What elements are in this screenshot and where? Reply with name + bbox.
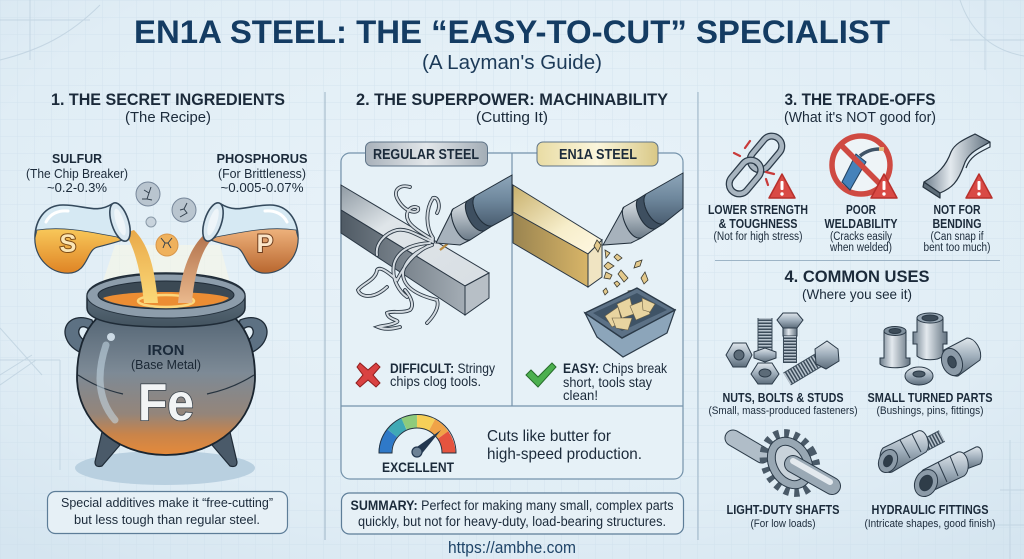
pill: EN1A steel <box>537 142 658 166</box>
stringy chips <box>358 186 439 329</box>
label: lower strength: (Not for high stress) <box>714 231 803 243</box>
panel: secret ingredients <box>26 90 308 534</box>
label: lower strength <box>708 203 808 243</box>
comparison frame <box>341 153 683 479</box>
illustration: broken chips <box>594 240 648 298</box>
subheading: recipe: (The Recipe) <box>125 109 211 126</box>
label: lower strength: & TOUGHNESS <box>718 217 798 231</box>
callout: additives <box>48 492 288 534</box>
pill: EN1A steel: EN1A STEEL <box>559 147 637 163</box>
label: iron <box>131 342 201 372</box>
label: poor weldability: POOR <box>846 203 876 217</box>
section divider <box>715 260 1000 262</box>
label: lower strength: LOWER STRENGTH <box>708 203 808 217</box>
liquid streams <box>125 230 213 303</box>
text: cuts like butter: high-speed production. <box>487 446 642 463</box>
label: poor weldability: WELDABILITY <box>824 217 898 231</box>
subtitle: (A Layman's Guide) <box>422 52 602 74</box>
callout: additives: Special additives make it “free-cutting” <box>61 495 273 510</box>
heading: section 1: 1. THE SECRET INGREDIENTS <box>51 90 285 109</box>
cauldron legs <box>95 432 237 466</box>
label: not for bending: NOT FOR <box>934 203 980 217</box>
label: sulfur: (The Chip Breaker) <box>26 166 128 181</box>
icon: cauldron <box>65 230 267 485</box>
label: phosphorus: PHOSPHORUS <box>216 151 308 166</box>
text: difficult <box>390 360 495 389</box>
text: difficult: DIFFICULT: Stringy <box>390 360 495 376</box>
icon: green check <box>526 363 556 387</box>
label: nuts bolts: (Small, mass-produced fasteners) <box>708 405 858 417</box>
label: shafts: LIGHT-DUTY SHAFTS <box>726 503 840 517</box>
text: cuts like butter: Cuts like butter for <box>487 428 612 445</box>
subheading: not good for: (What it's NOT good for) <box>784 109 936 126</box>
label: phosphorus: ~0.005-0.07% <box>220 180 304 195</box>
illustration: EN1A cutting tool <box>603 173 683 245</box>
label: Fe: Fe <box>138 374 194 432</box>
panel: machinability <box>341 90 684 534</box>
icon: phosphorus flask: P <box>257 230 273 258</box>
gauge <box>379 414 456 475</box>
label: sulfur: SULFUR <box>52 151 103 166</box>
cauldron rim <box>87 273 245 327</box>
cauldron body <box>77 318 255 455</box>
icon: bent plate <box>923 134 990 198</box>
label: phosphorus: (For Brittleness) <box>218 166 306 181</box>
callout: additives: but less tough than regular steel. <box>74 512 260 527</box>
label: nuts bolts: NUTS, BOLTS & STUDS <box>722 391 844 405</box>
label: hydraulic <box>864 503 996 530</box>
icon: warning bending <box>966 174 992 198</box>
label: not for bending <box>924 203 991 254</box>
label: poor weldability: when welded) <box>829 242 892 254</box>
label: nuts bolts <box>708 391 858 417</box>
text: easy: short, tools stay <box>563 374 652 390</box>
panel: common uses <box>708 267 996 530</box>
cauldron handles <box>65 318 267 354</box>
label: hydraulic: HYDRAULIC FITTINGS <box>872 503 988 517</box>
text: easy: EASY: Chips break <box>563 360 668 376</box>
icon: sulfur flask <box>35 200 134 273</box>
text: easy <box>563 360 668 403</box>
icon: cracked bubbles <box>136 182 196 256</box>
illustration: regular steel bar <box>341 185 489 329</box>
label: turned parts: (Bushings, pins, fittings) <box>876 405 984 417</box>
text: easy: clean! <box>563 387 598 403</box>
icon: turned parts <box>880 313 981 385</box>
label: poor weldability <box>824 203 898 254</box>
callout: summary <box>342 493 684 534</box>
icon: broken chain <box>725 132 786 198</box>
subheading: where: (Where you see it) <box>802 286 912 302</box>
icon: no welding <box>832 136 890 194</box>
heading: section 3: 3. THE TRADE-OFFS <box>784 90 936 109</box>
label: not for bending: BENDING <box>932 217 982 231</box>
gauge label: EXCELLENT <box>382 460 455 475</box>
pill: regular steel <box>366 142 488 166</box>
label: phosphorus <box>216 151 308 195</box>
icon: red cross <box>356 363 380 387</box>
icon: warning chain <box>769 174 795 198</box>
label: sulfur <box>26 151 128 195</box>
label: hydraulic: (Intricate shapes, good finish) <box>864 518 996 530</box>
icon: gear shaft <box>733 424 832 502</box>
column dividers <box>325 92 698 540</box>
icon: nuts and bolts <box>726 313 839 384</box>
label: turned parts: SMALL TURNED PARTS <box>868 391 992 405</box>
label: poor weldability: (Cracks easily <box>830 231 892 243</box>
label: turned parts <box>868 391 992 417</box>
pill: regular steel: REGULAR STEEL <box>373 147 479 163</box>
heading: section 4: 4. COMMON USES <box>784 267 930 286</box>
cauldron shadow <box>75 451 255 485</box>
text: cuts like butter <box>487 428 642 463</box>
panel: trade-offs <box>708 90 992 254</box>
icon: hydraulic fittings <box>875 431 982 500</box>
icon: sulfur flask: S <box>60 230 76 258</box>
illustration: regular steel cutting tool <box>436 175 512 245</box>
heading: section 2: 2. THE SUPERPOWER: MACHINABILITY <box>356 90 669 109</box>
label: iron: (Base Metal) <box>131 357 201 372</box>
callout: summary: SUMMARY: Perfect for making many small, complex parts <box>350 498 674 513</box>
label: iron: IRON <box>148 342 184 359</box>
footer url: https://ambhe.com <box>448 539 576 557</box>
text: difficult: chips clog tools. <box>390 373 481 389</box>
illustration: EN1A steel bar <box>513 185 602 287</box>
illustration: chip bin <box>585 288 675 357</box>
glow behind flasks <box>100 245 232 290</box>
icon: phosphorus flask <box>199 200 298 273</box>
label: shafts <box>726 503 840 530</box>
title: EN1A STEEL: THE “EASY-TO-CUT” SPECIALIST <box>134 14 890 50</box>
label: shafts: (For low loads) <box>750 518 816 530</box>
icon: warning welding <box>871 174 897 198</box>
callout: summary: quickly, but not for heavy-duty, load-bearing structures. <box>358 514 666 529</box>
label: not for bending: bent too much) <box>924 242 991 254</box>
label: not for bending: (Can snap if <box>930 231 984 243</box>
label: sulfur: ~0.2-0.3% <box>47 180 107 195</box>
subheading: cutting: (Cutting It) <box>476 109 548 126</box>
